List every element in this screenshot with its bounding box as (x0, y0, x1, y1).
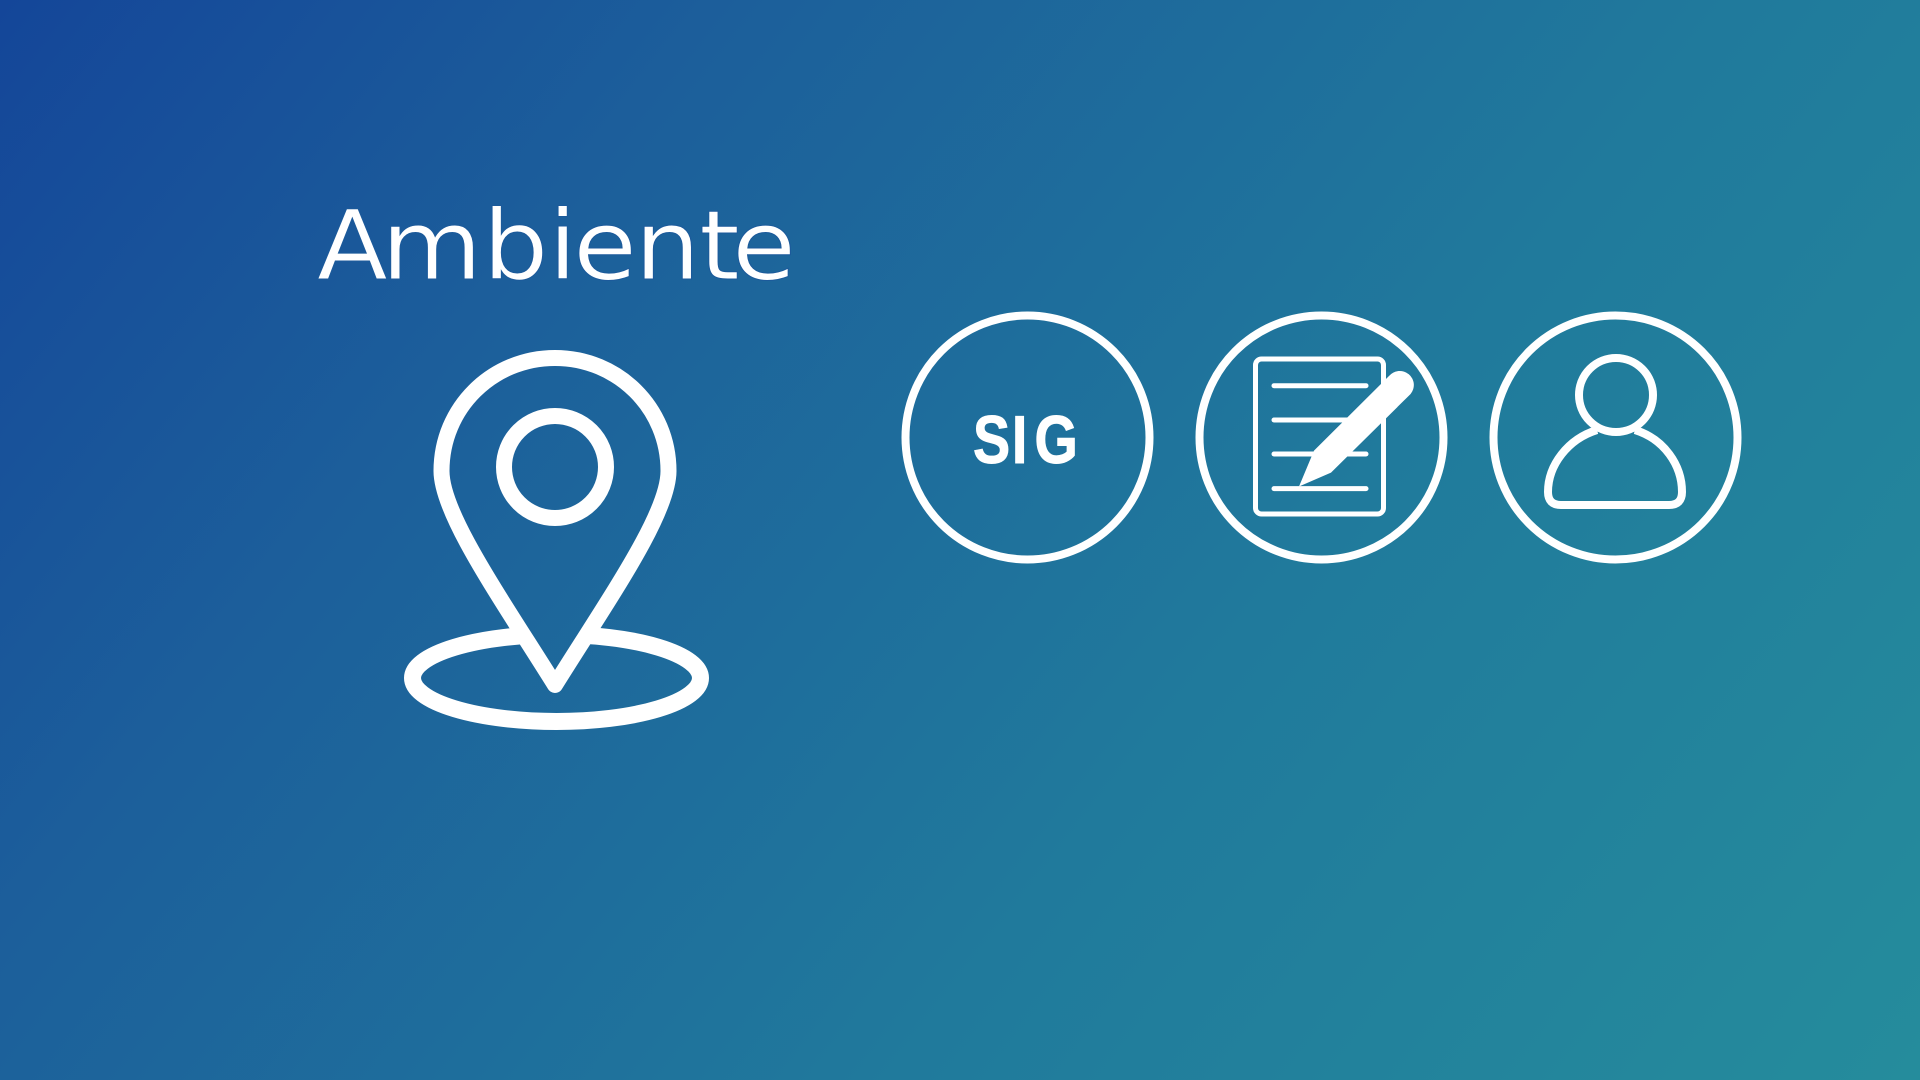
icon: location pin (412, 358, 700, 722)
document sheet (1256, 359, 1384, 514)
document lines (1274, 386, 1366, 489)
icon: document with pen (1200, 316, 1444, 560)
pin body (442, 358, 668, 685)
icon: user profile (1494, 316, 1738, 560)
pin base ellipse (412, 634, 700, 722)
user body (1548, 430, 1682, 505)
user head (1579, 358, 1653, 432)
title: Ambiente (317, 190, 796, 302)
pin inner ring (504, 416, 606, 518)
pen (1299, 371, 1414, 486)
SIG label: SIG (973, 403, 1078, 478)
icon: SIG circle (906, 316, 1150, 560)
